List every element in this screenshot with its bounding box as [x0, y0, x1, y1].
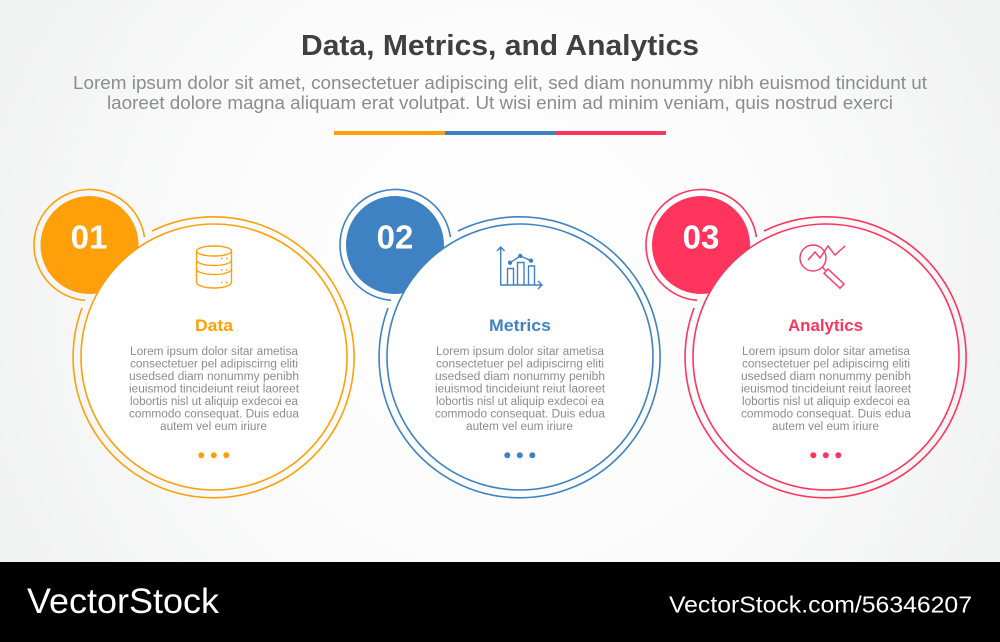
body text: data: consectetuer pel adipiscirng eliti [130, 358, 298, 370]
main circle: analytics [685, 217, 966, 498]
tricolour divider [334, 131, 666, 135]
panel: metrics [340, 189, 660, 498]
body text: data: lobortis nisl ut aliquip exdecoi ea [130, 396, 299, 408]
body text: data: usedsed diam nonummy penibh [129, 371, 299, 383]
body text: analytics: ieuismod tincideiunt reiut laoreet [741, 384, 912, 396]
icon: bar chart [497, 247, 542, 289]
subtitle text: laoreet dolore magna aliquam erat volutpat. Ut wisi enim ad minim veniam, quis nostrud exerci [107, 92, 893, 113]
subtitle text [73, 72, 927, 113]
heading: data: Data [195, 316, 234, 335]
dots [810, 452, 841, 458]
body text: data: Lorem ipsum dolor sitar ametisa [130, 346, 299, 358]
title: Data, Metrics, and Analytics [301, 30, 699, 62]
main circle: metrics [379, 217, 660, 498]
body text: data: ieuismod tincideiunt reiut laoreet [129, 384, 300, 396]
number 01: 01 [71, 218, 107, 256]
body text: metrics: consectetuer pel adipiscirng eliti [436, 358, 604, 370]
body text: analytics: commodo consequat. Duis edua [741, 408, 912, 420]
body text: metrics: commodo consequat. Duis edua [435, 408, 606, 420]
heading: metrics: Metrics [489, 316, 551, 335]
body text: metrics: autem vel eum iriure [466, 421, 573, 433]
body text: data: commodo consequat. Duis edua [129, 408, 300, 420]
panel: analytics [646, 189, 966, 498]
body text: analytics [741, 346, 912, 433]
body text: metrics: ieuismod tincideiunt reiut laoreet [435, 384, 606, 396]
dots [504, 452, 535, 458]
footer bar [0, 562, 1000, 642]
footer logo: VectorStock [27, 582, 220, 621]
body text: data [129, 346, 300, 433]
number badge 02 [340, 189, 450, 300]
icon: magnifier with trend line [800, 245, 845, 288]
heading: analytics: Analytics [788, 316, 863, 335]
number 02: 02 [377, 218, 413, 256]
body text: data: autem vel eum iriure [160, 421, 267, 433]
number badge 01 [34, 189, 144, 300]
body text: metrics: lobortis nisl ut aliquip exdecoi ea [436, 396, 605, 408]
number 03: 03 [683, 218, 719, 256]
body text: analytics: consectetuer pel adipiscirng eliti [742, 358, 910, 370]
body text: metrics: Lorem ipsum dolor sitar ametisa [436, 346, 605, 358]
body text: metrics [435, 346, 606, 433]
subtitle text: Lorem ipsum dolor sit amet, consectetuer adipiscing elit, sed diam nonummy nibh euismod tincidunt ut [73, 72, 927, 93]
icon: database [196, 246, 232, 288]
body text: analytics: usedsed diam nonummy penibh [741, 371, 911, 383]
body text: analytics: lobortis nisl ut aliquip exdecoi ea [742, 396, 911, 408]
body text: analytics: autem vel eum iriure [772, 421, 879, 433]
panel: data [34, 189, 354, 498]
main circle: data [73, 217, 354, 498]
number badge 03 [646, 189, 756, 300]
body text: metrics: usedsed diam nonummy penibh [435, 371, 605, 383]
body text: analytics: Lorem ipsum dolor sitar ametisa [742, 346, 911, 358]
footer image id: VectorStock.com/56346207 [669, 592, 972, 618]
dots [198, 452, 229, 458]
